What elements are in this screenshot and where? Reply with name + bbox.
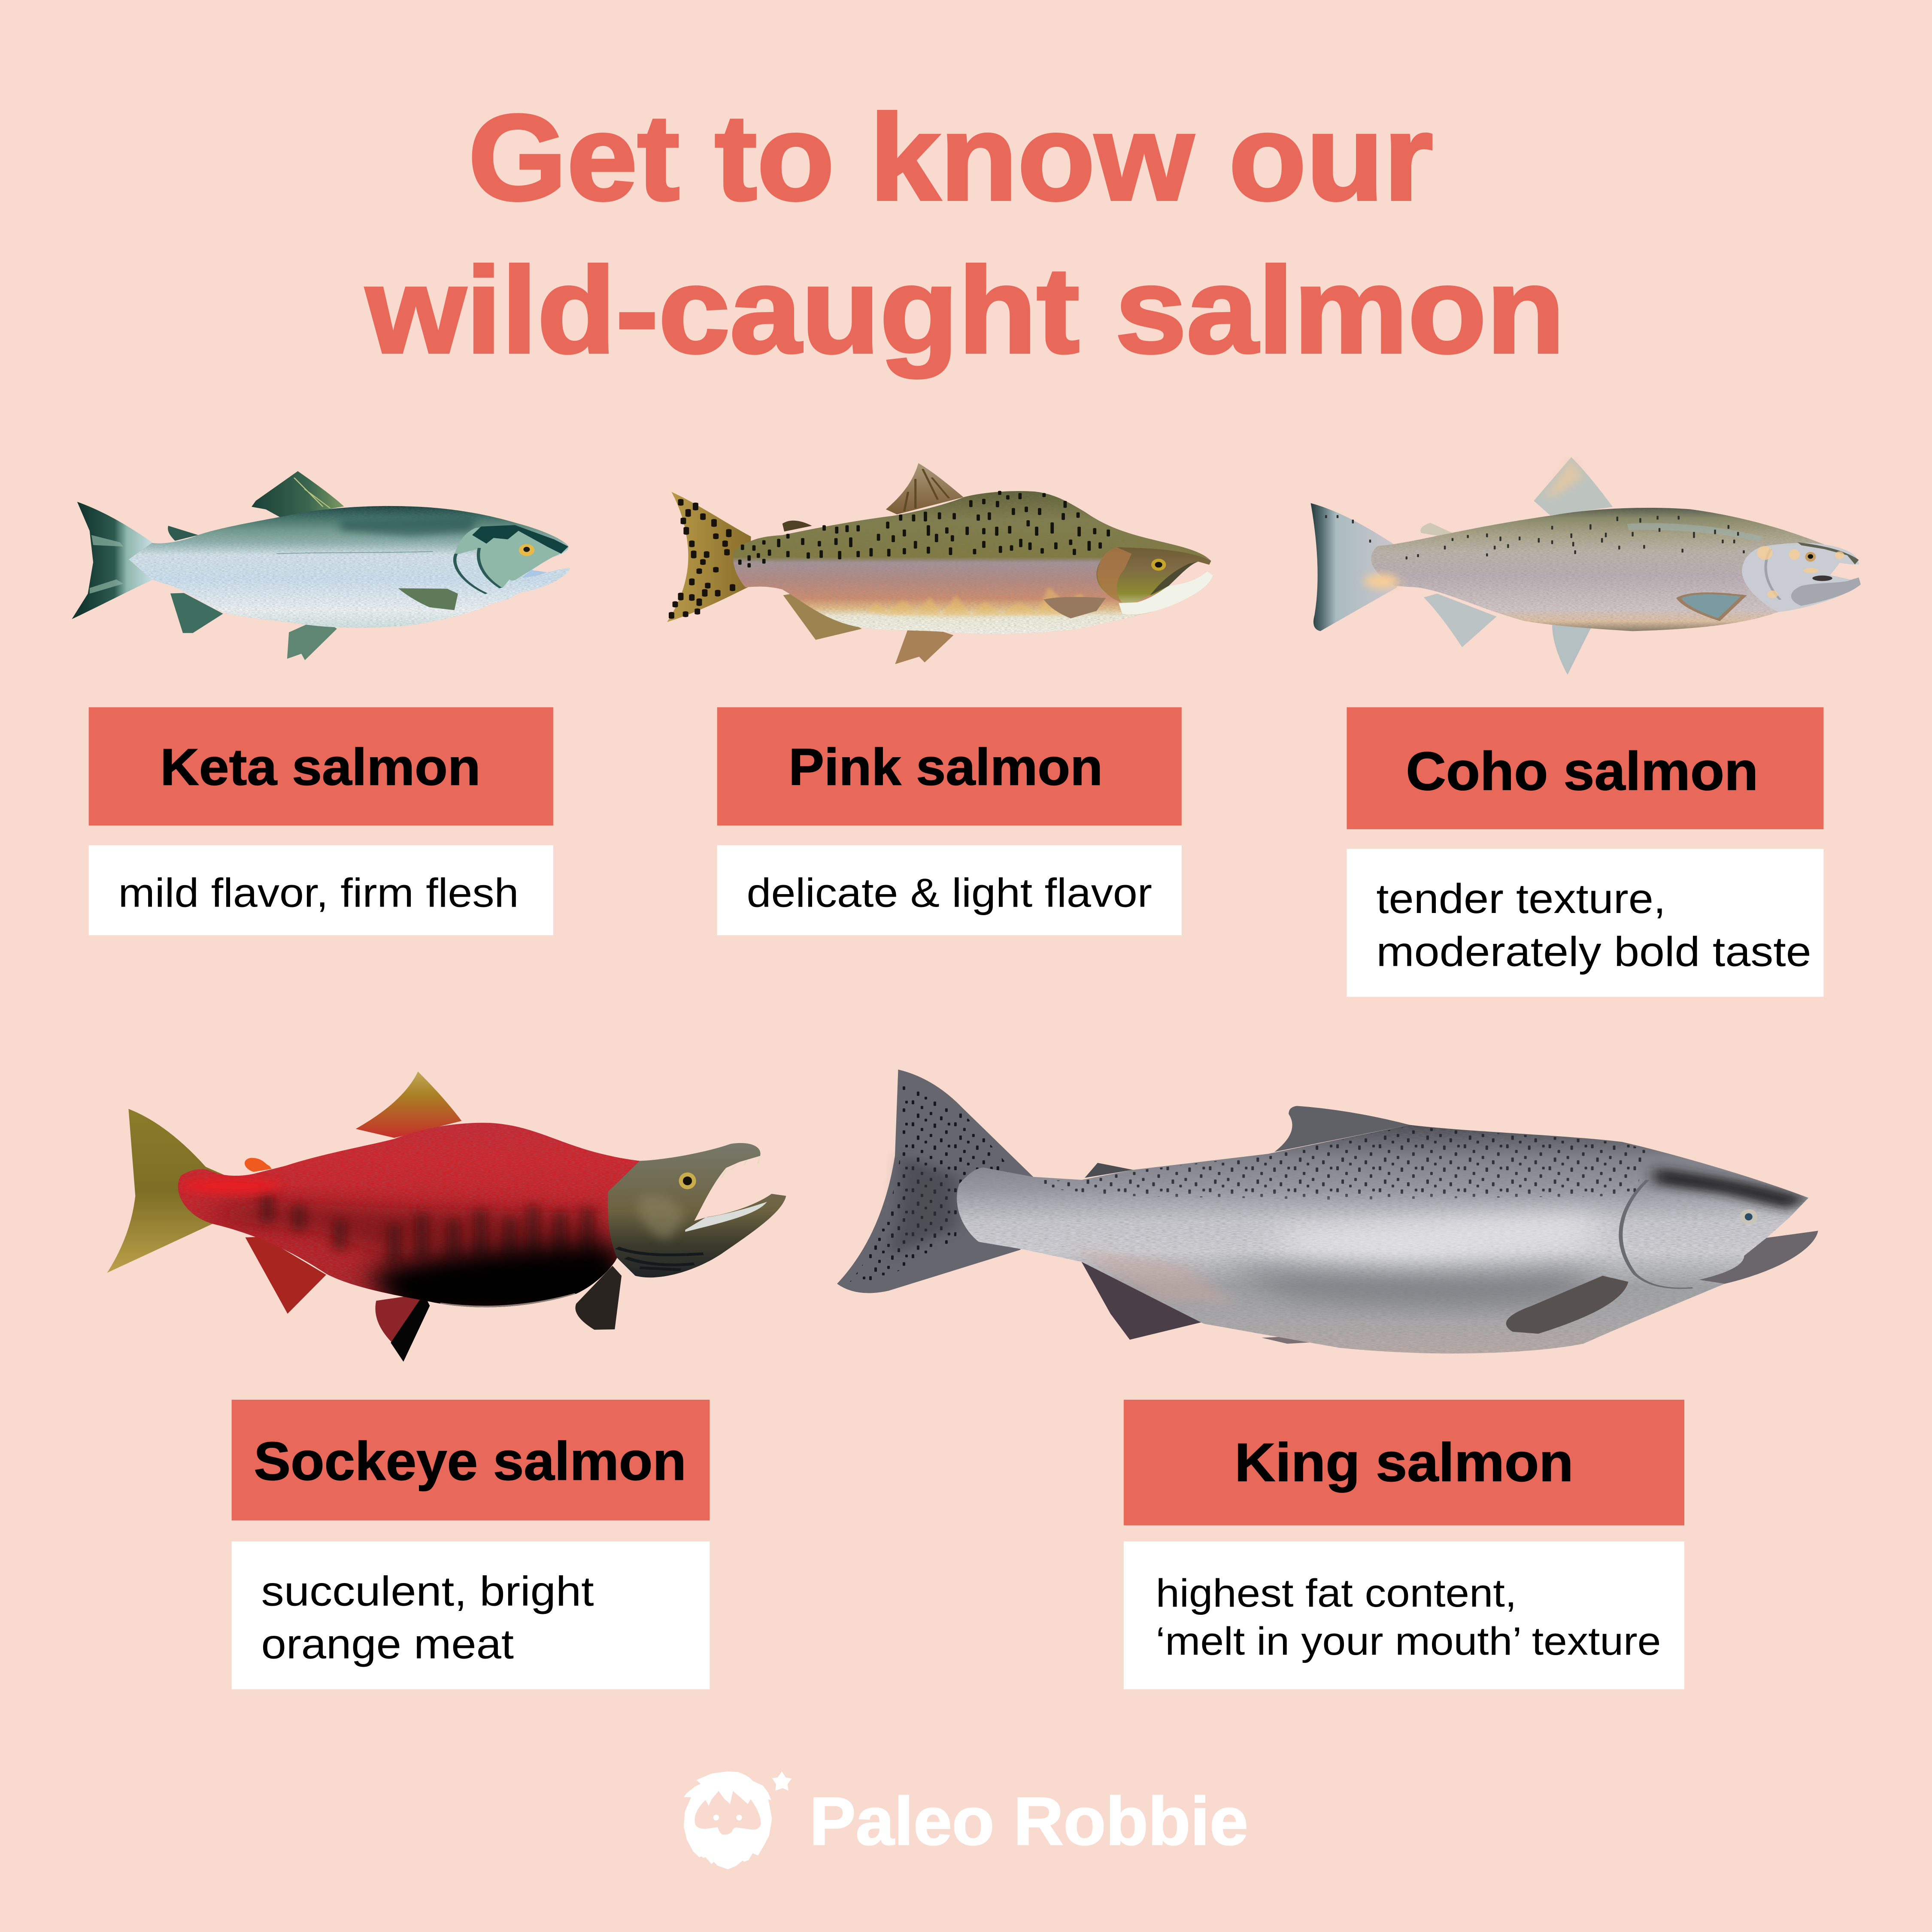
body shading — [1037, 1126, 1808, 1307]
head — [455, 527, 565, 588]
tail patch — [1365, 573, 1399, 589]
tail fin — [1311, 503, 1397, 631]
adipose fin — [1085, 1163, 1133, 1178]
gill line — [1621, 1180, 1692, 1288]
pectoral fin — [575, 1266, 622, 1330]
anal fin — [1424, 594, 1497, 647]
dorsal fin highlight — [1544, 459, 1583, 498]
tail inner dark band — [889, 1156, 956, 1256]
body speckles — [1326, 516, 1744, 559]
illustration: coho salmon — [1311, 457, 1861, 675]
wordmark: Paleo Robbie — [810, 1783, 1248, 1859]
dorsal fin — [1274, 1106, 1410, 1152]
panel: sockeye salmon — [232, 1400, 710, 1689]
bright peduncle highlight — [181, 1178, 281, 1194]
dorsal fin — [1534, 457, 1613, 516]
dark vertical streaks — [267, 1196, 588, 1262]
panel: coho salmon — [1347, 707, 1823, 997]
anal fin — [170, 593, 223, 633]
ventral fin — [1262, 1334, 1358, 1344]
body — [1371, 508, 1861, 631]
description: succulent, bright — [261, 1568, 594, 1614]
upper teeth — [722, 1158, 759, 1178]
adipose fin — [245, 1158, 272, 1172]
description: delicate & light flavor — [747, 870, 1152, 916]
name banner: Sockeye salmon — [254, 1431, 686, 1492]
name banner — [1124, 1400, 1684, 1526]
adipose fin — [168, 526, 198, 541]
description: tender texture, — [1376, 875, 1666, 922]
gill plate — [1097, 547, 1131, 602]
eye — [1805, 552, 1816, 562]
tail spots — [671, 500, 732, 618]
head crown — [1798, 542, 1859, 564]
description — [717, 845, 1182, 935]
jaw — [1699, 1231, 1818, 1284]
panel: king salmon — [1124, 1400, 1684, 1689]
name banner: King salmon — [1234, 1432, 1574, 1492]
title: Get to know our — [468, 90, 1433, 226]
mouth — [1150, 561, 1198, 595]
back stripe — [1627, 523, 1763, 541]
illustration: king salmon — [837, 1070, 1818, 1353]
head — [1742, 543, 1861, 612]
description: mild flavor, firm flesh — [118, 870, 519, 916]
name banner — [232, 1400, 710, 1520]
panel: pink salmon — [717, 707, 1182, 935]
back shading — [340, 518, 476, 537]
cheek plate — [639, 1195, 683, 1240]
icon: bearded face and star — [684, 1771, 792, 1869]
head — [1096, 547, 1211, 603]
description — [1124, 1541, 1684, 1689]
eye — [519, 544, 534, 556]
pectoral fin — [1043, 597, 1106, 619]
eye — [679, 1172, 696, 1189]
head markings — [1757, 546, 1844, 598]
gill stripes — [617, 1248, 704, 1270]
gill lines — [455, 548, 500, 594]
description: highest fat content, — [1156, 1571, 1517, 1615]
description: ‘melt in your mouth’ texture — [1156, 1620, 1661, 1663]
ventral fin dark edge — [391, 1294, 430, 1362]
title: wild-caught salmon — [364, 243, 1565, 379]
body spots — [740, 491, 1108, 567]
adipose fin — [1420, 523, 1454, 536]
description: moderately bold taste — [1376, 928, 1811, 975]
anal fin — [245, 1237, 326, 1314]
head crown — [472, 525, 568, 554]
description — [1347, 849, 1823, 997]
name banner — [1347, 707, 1823, 829]
head — [608, 1143, 786, 1277]
tail fin — [837, 1070, 1033, 1293]
belly warm tint — [1069, 1248, 1236, 1304]
head crown shadow — [1654, 1168, 1808, 1210]
black belly — [367, 1242, 640, 1320]
pectoral fin — [1679, 593, 1744, 620]
ventral fin — [895, 628, 953, 664]
lower jaw — [1119, 571, 1213, 615]
silver flank highlight — [1274, 1212, 1596, 1264]
name banner — [89, 707, 553, 825]
anal fin — [783, 593, 862, 640]
dorsal fin — [252, 471, 344, 517]
tail fin — [72, 502, 154, 619]
gill line — [1766, 549, 1780, 600]
illustration: keta salmon — [72, 471, 570, 660]
adipose fin — [783, 521, 812, 531]
name banner: Coho salmon — [1406, 741, 1758, 801]
pectoral fin — [1506, 1276, 1629, 1334]
lateral line — [276, 552, 433, 554]
dark red mottling — [203, 1202, 613, 1254]
description — [89, 845, 553, 935]
tail fin — [107, 1109, 226, 1273]
dorsal fin — [356, 1071, 461, 1138]
eye — [1151, 559, 1166, 571]
description: orange meat — [261, 1621, 514, 1668]
footer logo: paleo robbie — [684, 1771, 1248, 1869]
ventral fin — [375, 1294, 424, 1343]
illustration: sockeye salmon — [107, 1071, 786, 1362]
body — [178, 1123, 640, 1307]
tail speckle — [850, 1082, 1017, 1282]
ventral fin — [1552, 625, 1592, 675]
ventral fin — [287, 618, 337, 660]
anal fin — [1082, 1262, 1204, 1340]
mouth — [1812, 576, 1832, 581]
jaw — [1791, 577, 1861, 606]
panel: keta salmon — [89, 707, 553, 935]
lower belly shadow — [1223, 1264, 1590, 1307]
pectoral fin — [398, 588, 458, 610]
description — [232, 1541, 710, 1689]
dorsal fin rays — [904, 469, 949, 511]
belly flame marks — [867, 587, 1089, 617]
body shading — [179, 1174, 617, 1307]
body — [733, 491, 1213, 634]
title — [364, 90, 1565, 379]
illustration: pink salmon — [667, 463, 1213, 664]
eye — [1740, 1209, 1758, 1225]
tail fin light patches — [90, 535, 124, 594]
dorsal fin rays — [294, 478, 330, 508]
tail fin — [667, 492, 751, 622]
dorsal fin — [886, 463, 964, 514]
lower jaw highlight — [685, 1202, 767, 1232]
name banner — [717, 707, 1182, 825]
body — [957, 1125, 1818, 1353]
name banner: Pink salmon — [789, 738, 1103, 796]
body — [129, 506, 570, 628]
pale belly edge — [440, 1294, 576, 1307]
mouth interior — [522, 570, 547, 578]
back speckle — [1037, 1126, 1647, 1200]
name banner: Keta salmon — [160, 738, 481, 796]
